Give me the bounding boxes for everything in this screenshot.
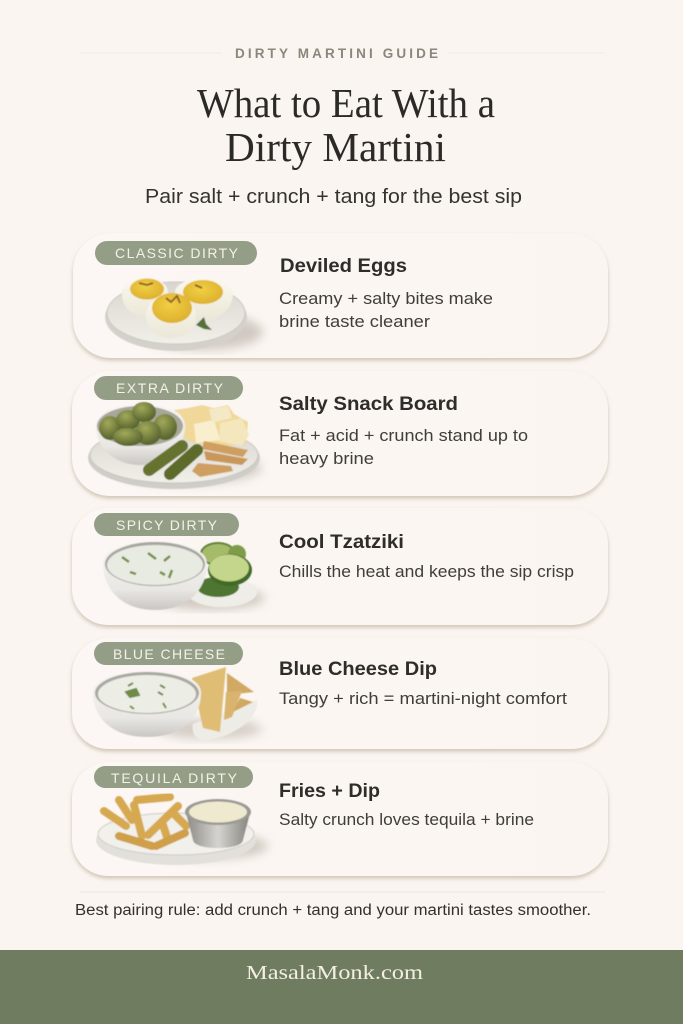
description — [279, 289, 493, 331]
title: What to Eat With a — [197, 80, 495, 126]
card background — [72, 762, 608, 876]
panel: extra dirty — [72, 371, 608, 496]
description: Creamy + salty bites make — [279, 289, 493, 308]
panel: blue cheese — [72, 638, 608, 749]
description: Salty crunch loves tequila + brine — [279, 810, 534, 829]
tag: spicy dirty — [94, 513, 239, 536]
footer band — [0, 950, 683, 1024]
tag: extra dirty: EXTRA DIRTY — [116, 380, 224, 396]
heading: Blue Cheese Dip — [279, 659, 437, 680]
tag: blue cheese — [94, 642, 243, 665]
icon: deviled eggs — [105, 278, 263, 351]
card background — [72, 638, 608, 749]
tag: tequila dirty: TEQUILA DIRTY — [111, 770, 238, 786]
title — [197, 80, 495, 170]
description: heavy brine — [279, 449, 374, 468]
card background — [72, 371, 608, 496]
card background — [73, 233, 608, 358]
panel: spicy dirty — [72, 508, 608, 625]
description: Chills the heat and keeps the sip crisp — [279, 562, 574, 581]
tag: tequila dirty — [94, 766, 253, 788]
icon: fries and dip — [96, 797, 268, 865]
title: Dirty Martini — [225, 124, 446, 170]
tag: classic dirty — [95, 241, 257, 265]
panel: tequila dirty — [72, 762, 608, 876]
description: Tangy + rich = martini-night comfort — [279, 689, 567, 708]
footer band: MasalaMonk.com — [246, 962, 424, 984]
heading: Fries + Dip — [279, 781, 380, 802]
heading: Deviled Eggs — [280, 256, 407, 277]
heading: Cool Tzatziki — [279, 532, 404, 553]
icon: blue cheese dip — [93, 667, 262, 740]
description: Fat + acid + crunch stand up to — [279, 426, 528, 445]
panel: classic dirty — [73, 233, 608, 358]
tag: extra dirty — [94, 376, 243, 400]
icon: cool tzatziki — [103, 542, 265, 610]
footer note: pairing rule: Best pairing rule: add crunch + tang and your martini tastes smoother. — [75, 902, 591, 919]
eyebrow: guide label: DIRTY MARTINI GUIDE — [235, 46, 438, 61]
tag: classic dirty: CLASSIC DIRTY — [115, 245, 239, 261]
icon: salty snack board — [88, 402, 262, 489]
heading: Salty Snack Board — [279, 394, 458, 415]
tag: blue cheese: BLUE CHEESE — [113, 646, 225, 662]
card background — [72, 508, 608, 625]
subtitle: Pair salt + crunch + tang for the best sip — [145, 186, 522, 208]
description — [279, 426, 528, 468]
tag: spicy dirty: SPICY DIRTY — [116, 517, 218, 533]
description: brine taste cleaner — [279, 312, 430, 331]
